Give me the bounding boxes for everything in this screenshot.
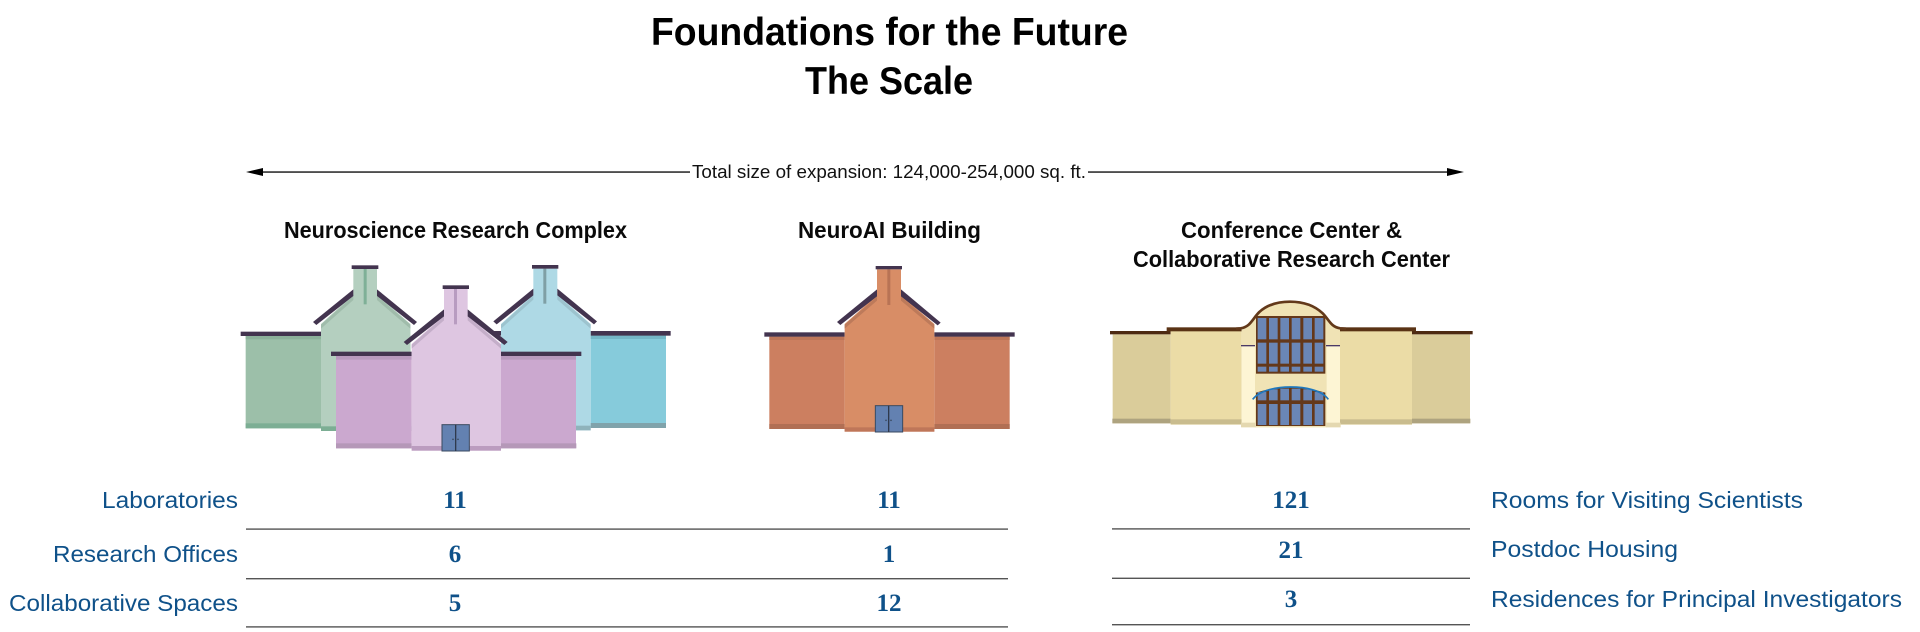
numbers: Neuroscience Research Complex [443, 487, 467, 617]
icon: double door [875, 406, 903, 432]
numbers: NeuroAI Building: 12 [876, 590, 902, 617]
icon: double door [442, 425, 469, 451]
right row labels: Postdoc Housing [1491, 536, 1678, 562]
green wing [241, 332, 321, 428]
central tower with arched parapet [1236, 302, 1346, 427]
numbers: NeuroAI Building: 11 [877, 487, 901, 514]
title: Foundations for the Future [651, 11, 1128, 54]
numbers: NeuroAI Building: 1 [883, 541, 895, 568]
building: Neuroscience Research Complex [241, 265, 671, 451]
green main block [313, 265, 417, 431]
right wing [934, 332, 1015, 429]
purple central block [404, 285, 508, 451]
numbers: Conference Center [1272, 487, 1310, 613]
right row labels: Rooms for Visiting Scientists [1491, 487, 1803, 513]
right row labels [1491, 487, 1902, 612]
heading: Neuroscience Research Complex: Neuroscience Research Complex [284, 217, 627, 243]
left wing [764, 332, 845, 429]
title: The Scale [805, 60, 973, 103]
numbers: Conference Center: 21 [1278, 537, 1304, 564]
central block [837, 266, 941, 432]
purple wings [331, 352, 581, 448]
building: NeuroAI Building [764, 266, 1015, 432]
left row labels: Collaborative Spaces [9, 590, 238, 616]
heading: Conference Center and Collaborative Research Center: Collaborative Research Center [1133, 246, 1450, 272]
heading: Conference Center and Collaborative Research Center [1133, 217, 1450, 272]
numbers: NeuroAI Building [876, 487, 902, 617]
heading: Conference Center and Collaborative Research Center: Conference Center & [1181, 217, 1402, 243]
blue wing [591, 331, 671, 428]
arrow: total size of expansion [246, 161, 1464, 182]
left row labels [9, 487, 238, 616]
building: Conference Center [1110, 302, 1473, 427]
left row labels: Laboratories [102, 487, 238, 513]
heading: NeuroAI Building: NeuroAI Building [798, 217, 981, 243]
blue main block [493, 265, 597, 430]
numbers: Neuroscience Research Complex: 6 [449, 541, 461, 568]
numbers: Conference Center: 3 [1285, 586, 1297, 613]
numbers: Neuroscience Research Complex: 5 [449, 590, 461, 617]
left row labels: Research Offices [53, 541, 238, 567]
upper window [1256, 316, 1325, 374]
table rules [246, 528, 1470, 628]
inner wings [1167, 327, 1416, 425]
numbers: Neuroscience Research Complex: 11 [443, 487, 467, 514]
outer wings [1110, 331, 1473, 423]
arrow: total size of expansion: Total size of expansion: 124,000-254,000 sq. ft. [692, 161, 1086, 182]
title [651, 11, 1128, 103]
numbers: Conference Center: 121 [1272, 487, 1310, 514]
right row labels: Residences for Principal Investigators [1491, 586, 1902, 612]
lower window with blue arch [1253, 387, 1328, 426]
